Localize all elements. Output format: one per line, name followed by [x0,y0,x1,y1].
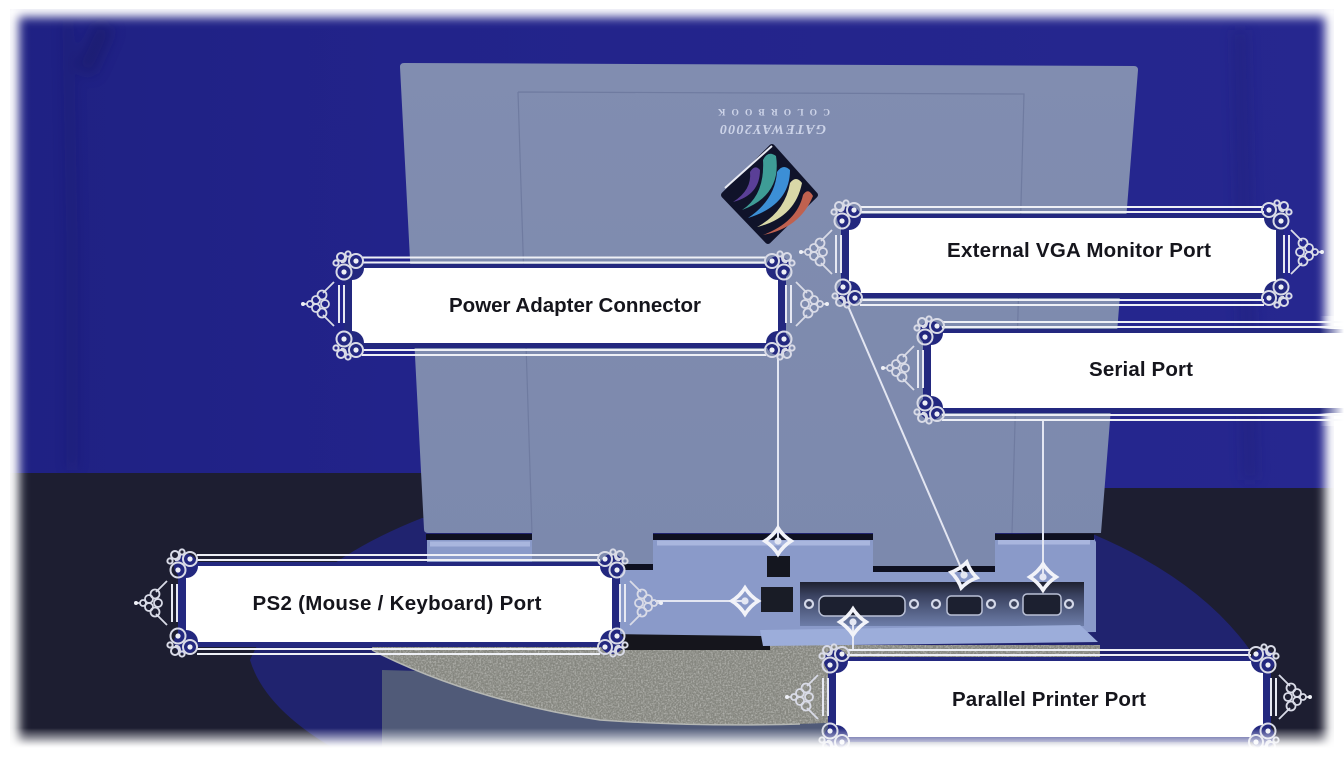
bottom edge fade [0,728,1344,757]
label: External VGA Monitor Port: External VGA Monitor Port [947,239,1211,262]
laptop base [427,535,1096,636]
pedestal rim highlight [372,650,800,725]
marker: power connector [762,524,794,558]
label: Parallel Printer Port: Parallel Printer Port [952,688,1146,711]
modem jack [767,556,790,577]
pedestal speckled top [372,645,1100,725]
marker: parallel port [836,606,870,638]
lid inset panel outline [518,92,1024,533]
hinge shadows [426,537,1094,569]
serial port [1023,594,1061,615]
port panel [800,582,1084,626]
brand text on lid: COLORBOOK [717,106,830,116]
PS2 port [761,587,793,612]
label: Serial Port: Serial Port [1089,358,1193,381]
label: PS2 (Mouse / Keyboard) Port [134,549,663,657]
turntable disc [250,518,1250,752]
label: Power Adapter Connector: Power Adapter Connector [449,294,701,317]
laptop [400,63,1138,646]
speckle [372,645,1100,725]
shadow under laptop [610,634,770,650]
VGA port [947,596,982,615]
base top highlight [430,542,1090,544]
marker: VGA port [944,555,984,595]
label: PS2 (Mouse / Keyboard) Port: PS2 (Mouse / Keyboard) Port [252,592,542,615]
right edge fade over serial label [1320,316,1344,426]
laptop lid [400,63,1138,566]
marker: PS2 port [728,584,762,618]
rainbow logo [724,146,815,241]
label: Power Adapter Connector [301,251,829,360]
port screws [805,600,1073,608]
brand text on lid: GATEWAY2000 [720,121,826,136]
pedestal side wall [382,670,1120,752]
label: Parallel Printer Port [785,644,1312,752]
label: Serial Port [881,316,1344,424]
brand text on lid [717,106,830,136]
label: External VGA Monitor Port [799,200,1324,308]
port door flap [760,625,1098,646]
parallel port [819,596,905,616]
marker: serial port [1026,560,1060,594]
connector lines [655,306,1043,650]
pedestal [372,634,1120,752]
